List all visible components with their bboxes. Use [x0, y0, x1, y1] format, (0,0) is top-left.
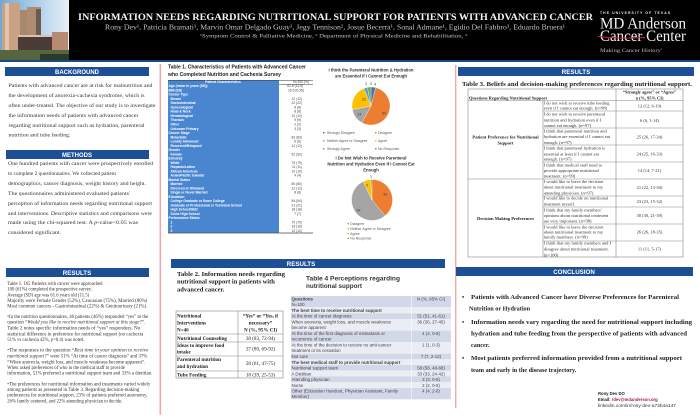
panel: table 1 patient characteristics: Patient Characteristics	[205, 80, 241, 84]
panel: table 1 patient characteristics: Cancer Type	[168, 93, 188, 97]
table 4 rows: Member)	[292, 394, 310, 399]
panel: table 1 patient characteristics: Female	[170, 152, 182, 156]
table 3 grid	[468, 89, 683, 257]
panel: table 1 patient characteristics	[167, 64, 313, 233]
panel: table 1 patient characteristics: Graduate or Professional or Technical School	[170, 203, 242, 207]
panel: table 1 patient characteristics: Cancer Stage	[168, 131, 190, 135]
legend 2: Agree	[350, 232, 360, 236]
results text: Most common cancers - Gastrointestinal (22%) & Genitourinary (21%).	[7, 305, 147, 310]
divider line left	[160, 64, 161, 415]
table 4 rows: Questions	[292, 296, 314, 302]
methods text: and interventions. Descriptive statistics and comparisons were	[8, 211, 153, 217]
panel: table 1 patient characteristics: 10 (10)	[292, 169, 302, 173]
panel: table 1 patient characteristics: 70 (70)	[292, 220, 302, 224]
middle results bar	[171, 259, 445, 268]
table 3 title: Table 3. Beliefs and decision-making preferences regarding nutritional support.	[462, 81, 692, 88]
panel: table 3 beliefs: I do not wish to receive tube feeding	[544, 101, 610, 106]
table 4 title: nutritional support	[306, 283, 363, 290]
panel: table 2 information needs: 38 (83, 72-94)	[246, 335, 275, 342]
panel: table 1 patient characteristics: 52 (52)	[292, 152, 302, 156]
table 2 title: Table 2. Information needs regarding	[177, 271, 286, 278]
pie chart: do not wish parenteral nutrition	[327, 156, 415, 241]
panel: table 3 beliefs: I would like to decide on nutritional	[544, 196, 609, 201]
panel: table 1 patient characteristics: 22 (22)	[292, 101, 302, 105]
panel: results left	[6, 268, 152, 404]
panel: table 3 beliefs: 12 (12, 6-19)	[638, 104, 662, 110]
table 4 rows: The best medical staff to provide nutritional support	[292, 360, 401, 365]
panel: table 3 beliefs: about nutritional treatment to my	[544, 229, 604, 234]
affiliations: ¹Symptom Control & Palliative Medicine, ² Department of Physical Medicine and Rehabilitation, ³	[200, 33, 467, 40]
table 4 rows: Other (Education Handout, Physician Assistant, Family	[292, 388, 399, 394]
panel: table 3 beliefs: I think that my family members and I	[544, 241, 612, 246]
panel: table 1 patient characteristics: High School/GED	[170, 208, 198, 212]
panel: table 1 patient characteristics: 18 (18)	[292, 208, 302, 212]
panel: table 2 information needs: N=46	[177, 328, 189, 334]
table 2 title: advanced cancer.	[177, 286, 225, 293]
panel: table 1 patient characteristics: Other	[170, 122, 180, 126]
legend 2: Disagree	[350, 222, 364, 226]
background text: often under-treated. The objective of our study is to investigate	[8, 102, 156, 109]
pie chart: do not wish parenteral nutrition: 6	[366, 183, 368, 187]
panel: table 3 beliefs: I think that parenteral hydration is	[544, 146, 605, 151]
methods text: The questionnaires administered evaluated patients'	[8, 191, 130, 197]
pie chart: essential parenteral nutrition: 3	[365, 82, 367, 86]
panel: table 3 beliefs: n (%, 95% CI)	[636, 95, 664, 100]
pie chart: essential parenteral nutrition: 22	[362, 97, 366, 101]
panel: table 1 patient characteristics: Hispanic/Latino	[170, 165, 195, 169]
panel: table 1 patient characteristics: 3 (3)	[294, 127, 301, 131]
panel: table 3 beliefs: even if I cannot eat enough. (n=98)	[544, 106, 608, 111]
table 2 grid	[176, 311, 283, 378]
panel: methods	[6, 150, 153, 236]
panel: table 1 patient characteristics: 18 (18)	[292, 225, 302, 229]
panel: table 3 beliefs: I think that parenteral nutrition and	[544, 129, 608, 134]
table 4 rows: At the time of the decision to receive no anti-cancer	[292, 342, 392, 348]
table 4 rows: Attending physician	[292, 377, 330, 382]
panel: table 1 patient characteristics: Unknown Primary	[170, 127, 199, 131]
panel: table 3 beliefs: 6 (6, 1-14)	[640, 118, 660, 124]
conclusion bullets: •	[462, 294, 464, 301]
background text: the information needs of patients with advanced cancer	[8, 112, 139, 119]
logo: MD Anderson Cancer Center: Making Cancer History'	[600, 49, 662, 54]
panel: table 1 patient characteristics: Marital Status	[168, 178, 190, 182]
table 4 rows: Not sure	[292, 354, 309, 359]
panel: table 1 patient characteristics: 11 (11)	[292, 165, 302, 169]
panel: table 2 information needs: Ideas to improve food	[177, 343, 224, 349]
results text	[7, 282, 152, 404]
panel: table 1 patient characteristics: Recurrent/Relapsed	[170, 144, 202, 148]
panel: table 1 patient characteristics: 83 (83)	[292, 135, 302, 139]
panel: table 3 beliefs: I think that medical staff need to	[544, 162, 603, 167]
panel: table 1 patient characteristics: Some High School	[170, 212, 200, 216]
panel: table 1 patient characteristics: Age (mean in years (SD))	[168, 84, 208, 88]
chart title 2: Enough	[363, 168, 379, 172]
panel: table 3 beliefs: Support	[497, 140, 514, 146]
chart title 2	[327, 156, 415, 172]
panel: table 1 patient characteristics: 8 (8)	[294, 110, 301, 114]
results text: Table 2 notes specific information needs of “yes” responders. No	[7, 326, 141, 332]
panel: table 1 patient characteristics: 3	[170, 229, 172, 233]
panel: table 1 patient characteristics: 9 (9)	[294, 118, 301, 122]
legend 1: Neither Agree or Disagree	[327, 139, 368, 143]
panel: table 1 patient characteristics: College Graduate or Some College	[170, 199, 225, 203]
panel: table 3 beliefs: 30 (30, 21-39)	[637, 213, 663, 219]
panel: table 1 patient characteristics: 12 (12)	[292, 97, 302, 101]
panel: table 3 beliefs: 24 (25, 16-33)	[637, 152, 663, 158]
panel: table 3 beliefs: hydration are essential if I cannot eat	[544, 134, 611, 139]
methods text: made using the chi-squared test. A p-value<0.05 was	[8, 220, 138, 226]
panel: table 3 beliefs: provide appropriate nutritional	[544, 168, 600, 173]
panel: table 3 beliefs: 11 (11, 5-17)	[638, 246, 662, 252]
legend 2: No Response	[350, 237, 372, 241]
panel: table 3 beliefs: about nutritional treatment to my	[544, 185, 604, 190]
panel: table 1 patient characteristics: Single or Never Married	[170, 191, 208, 195]
legend 1: Disagree	[378, 131, 392, 135]
table 4 rows: 4 (4, 2-8)	[422, 388, 440, 394]
table 4 rows: The best time to receive nutritional support	[292, 308, 382, 313]
panel: table 3 beliefs: 25 (26, 17-34)	[637, 134, 663, 140]
table 4 rows: At the time of cancer diagnosis	[292, 314, 352, 319]
panel: table 1 patient characteristics: 54 (54)	[292, 199, 302, 203]
panel: table 1 patient characteristics: Performance Status	[168, 216, 200, 220]
legend 1	[323, 131, 399, 151]
results text: nutritional support? ” were 51% “At time of cancer diagnosis” and 37%	[7, 353, 147, 359]
panel: table 2 information needs: intake	[177, 350, 191, 356]
panel: table 3 beliefs: 21 (22, 13-30)	[637, 185, 663, 191]
panel: table 2 information needs: Nutritional	[177, 314, 202, 320]
panel: table 1 patient characteristics: Locally Advanced	[170, 140, 198, 144]
contact details	[598, 391, 677, 408]
legend 1: Strongly Disagree	[327, 131, 355, 135]
panel: table 1 patient characteristics: 10 (10)	[292, 114, 302, 118]
conclusion bullets: Nutrition or Hydration	[469, 306, 531, 312]
methods text: considered significant.	[8, 229, 61, 236]
photo: hospital buildings	[0, 0, 69, 60]
pie chart: do not wish parenteral nutrition: 1	[370, 175, 372, 179]
heading: methods: METHODS	[62, 153, 92, 159]
table 4 rows: A Dietitian	[292, 371, 312, 376]
panel: table 3 beliefs: disagree about nutritional treatment.	[544, 246, 609, 251]
panel: table 1 patient characteristics: N=100 (%)	[293, 80, 309, 84]
panel: table 1 patient characteristics: Metastatic	[170, 135, 187, 139]
table 2 title	[177, 271, 286, 293]
panel: table 1 patient characteristics: 7 (7)	[294, 212, 301, 216]
chart title 1	[329, 68, 414, 78]
panel: table 3 beliefs: nutrition and hydration even if I	[544, 117, 602, 122]
results text: •The preferences for nutritional information and treatments varied widely	[7, 383, 151, 388]
table 4 rows: 36 (36, 27-45)	[417, 319, 445, 324]
table 1 title: Table 1. Characteristics of Patients with Advanced Cancer	[168, 64, 306, 70]
table 1 title: who Completed Nutrition and Cachexia Survey	[167, 72, 281, 78]
table 4 rows: 33 (33, 24-42)	[417, 371, 445, 376]
background text: the development of anorexia-cachexia syndrome, which is	[8, 92, 144, 99]
pie 1 wedges	[352, 87, 390, 125]
table 4 rows: N (%, 95% CI)	[417, 296, 446, 302]
results text: Majority were Female Gender (52%), Caucasian (75%), Married (80%)	[7, 299, 148, 304]
divider line right	[455, 65, 456, 408]
panel: table 1 patient characteristics: 80 (80)	[292, 182, 302, 186]
conclusion bullets: team and early in the disease trajectory.	[471, 367, 577, 374]
results text: question “Would you like to receive nutritional support at this stage? ”.	[7, 320, 145, 326]
background text: nutrition and tube feeding.	[8, 132, 70, 139]
panel: table 4 perceptions	[291, 276, 451, 399]
panel: table 3 beliefs: I do not wish to receive parenteral	[544, 112, 606, 117]
panel: table 3 beliefs: family members. (n=99)	[544, 235, 588, 240]
panel: table 1 patient characteristics: Ethnicity	[168, 157, 183, 161]
panel: table 2 information needs: 18 (39, 25-53)	[246, 372, 275, 378]
panel: table 1 patient characteristics: White	[170, 161, 180, 165]
panel: table 1 patient characteristics: Hematological	[170, 114, 193, 118]
panel: table 3 beliefs: (n=100)	[544, 252, 559, 257]
table 4 rows: treatment or its cessation	[292, 348, 341, 353]
pie chart: essential parenteral nutrition: 3	[370, 82, 372, 86]
pie chart: essential parenteral nutrition	[323, 68, 414, 151]
panel: table 3 beliefs: enough. (n=97)	[544, 140, 572, 145]
panel: table 1 patient characteristics: 4 (4)	[294, 174, 301, 178]
panel: conclusion	[456, 267, 693, 408]
table 4 rows: At the time of the first diagnosis of metastasis or	[292, 331, 386, 336]
conclusion bullets: Patients with Advanced Cancer have Diverse Preferences for Parenteral	[471, 294, 679, 301]
panel: table 1 patient characteristics: Gender	[168, 148, 181, 152]
panel: table 1 patient characteristics: 8 (8)	[294, 191, 301, 195]
results text: 100 (61%) completed the prospective survey.	[7, 288, 92, 293]
pie chart: essential parenteral nutrition: 54	[382, 111, 386, 115]
panel: table 3 beliefs: attending physician. (n=97)	[544, 190, 594, 195]
conclusion heading	[456, 267, 693, 276]
conclusion bullets: hydration and tube feeding from the perspective of patients with advanced	[471, 330, 688, 337]
chart title 2: I Do Not Wish to Receive Parenteral	[336, 156, 406, 160]
panel: table 1 patient characteristics: 12 (12)	[292, 186, 302, 190]
background text: regarding nutritional support such as hydration, parenteral	[8, 123, 145, 129]
panel: table 1 patient characteristics: 12 (12)	[292, 144, 302, 148]
panel: table 1 patient characteristics: 8 (8)	[294, 106, 301, 110]
table 4 rows: Nurse	[292, 383, 304, 388]
panel: table 3 beliefs: opinions about nutritional treatment	[544, 213, 609, 218]
table 4 rows: become apparent	[292, 325, 326, 330]
panel: table 3 beliefs: are very important. (n=98)	[544, 218, 592, 223]
panel: table 3 beliefs: 14 (14, 7-21)	[638, 168, 662, 174]
chart title 2: Nutrition and Hydration Even If I Cannot Eat	[327, 162, 415, 166]
panel: table 3 beliefs: I would like to leave the decision	[544, 179, 604, 184]
table 4 rows: 58 (58, 48-68)	[417, 366, 445, 371]
panel: table 1 patient characteristics: 2	[170, 225, 172, 229]
panel: table 1 patient characteristics: Head & Neck	[170, 110, 191, 114]
middle results bar: RESULTS	[287, 261, 315, 268]
results text: •The responses to the question “ Best time in your opinion to receive	[7, 348, 148, 354]
results text: •In the nutrition questionnaires, 46 patients (46%) responded “yes” to the	[7, 314, 148, 320]
panel: table 2 information needs: 28 (61, 47-75)	[246, 360, 275, 367]
panel: table 2 information needs	[176, 271, 286, 378]
panel: table 1 patient characteristics: Breast	[170, 97, 182, 101]
table 4 rows	[291, 296, 451, 399]
pie chart: essential parenteral nutrition: 14	[357, 112, 361, 116]
panel: table 3 beliefs: cannot eat enough. (n=97)	[544, 123, 591, 128]
results text: Average (SD) age was 61.6 years old (11.5)	[7, 293, 90, 298]
table 4 title	[306, 276, 400, 290]
panel: table 2 information needs: necessary”	[249, 320, 273, 326]
panel: table 1 patient characteristics: 61.6 (11.5)	[287, 84, 303, 88]
chart title 1: are Essential If I Cannot Eat Enough	[335, 74, 407, 78]
panel: table 1 patient characteristics: 21 (21)	[292, 203, 302, 207]
legend 1: Agree	[378, 139, 387, 143]
panel: table 1 patient characteristics: BMI (SD)	[168, 88, 182, 92]
authors: Rony Dev¹, Patricia Bramati¹, Marvin Omar Delgado Guay¹, Jegy Tennison², Josue Becerra¹, Sonal Admane¹, Egidio Del Fabbro³, Eduardo Bruera¹	[105, 22, 565, 31]
table 4 title: Table 4 Perceptions regarding	[306, 276, 400, 282]
conclusion bullets: •	[462, 355, 464, 362]
panel: table 2 information needs: and hydration	[177, 364, 208, 370]
table 4 rows: When anorexia, weight loss, and muscle weakness	[292, 319, 392, 324]
header banner	[0, 0, 700, 62]
logo: MD Anderson Cancer Center: THE UNIVERSITY OF TEXAS	[600, 11, 671, 15]
methods text: One hundred patients with cancer were prospectively enrolled	[8, 161, 153, 167]
panel: table 2 information needs: N (%, 95% CI)	[244, 326, 277, 334]
panel: table 1 patient characteristics: Gastrointestinal	[170, 101, 196, 105]
background text: Patients with advanced cancer are at risk for malnutrition and	[8, 82, 153, 89]
methods text: demographics, cancer diagnosis, weight history and height.	[8, 181, 146, 187]
panel: table 3 beliefs: Questions Regarding Nutritional Support	[469, 96, 547, 100]
panel: table 3 beliefs: I would like to leave the decision	[544, 224, 604, 229]
panel: table 3 beliefs: essential at least if I cannot eat	[544, 151, 600, 156]
background text	[8, 82, 156, 139]
panel: table 2 information needs: Parenteral nutrition	[177, 357, 221, 363]
results text: 26% family centered, and 22% attending physician to decide.	[7, 399, 122, 404]
table 4 rows: 7 (7, 2-12)	[421, 354, 442, 359]
table 4 rows: recurrence of cancer	[292, 337, 332, 342]
panel: table 3 beliefs: “Strongly agree” or “Agree”	[623, 90, 676, 94]
results text: When asked preferences of who in the medical staff to provide	[7, 366, 125, 371]
table 4 rows: 3 (3, 0-6)	[422, 377, 440, 382]
table 4 rows: N=100	[292, 302, 305, 307]
panel: table 1 patient characteristics: 75 (75)	[292, 161, 302, 165]
panel: table 2 information needs: Interventions	[177, 320, 206, 326]
conclusion bullets: Most patients preferred information provided from a nutritional support	[471, 355, 683, 362]
panel: table 1 patient characteristics: 2 (2)	[294, 122, 301, 126]
methods text: perception of information needs regarding nutritional support	[8, 200, 153, 207]
conclusion bullets: •	[462, 319, 464, 326]
table 4 rows: 2 (2, 0-5)	[422, 383, 440, 388]
panel: table 1 patient characteristics: Divorced or Widowed	[170, 186, 204, 190]
chart title 1: I think the Parenteral Nutrition & Hydration	[329, 68, 414, 72]
methods text	[8, 161, 153, 236]
results text: 51% vs cachexia 42%, p=0.4) was noted.	[7, 338, 85, 343]
contact details: Rony Dev DO	[598, 391, 626, 396]
panel: table 2 information needs: Tube Feeding	[177, 372, 207, 378]
legend 1: No Response	[378, 147, 399, 151]
panel: table 3 beliefs: Decision Making Preferences	[477, 216, 534, 221]
pie chart: do not wish parenteral nutrition: 39	[383, 192, 387, 196]
legend 2	[348, 222, 391, 241]
panel: table 1 patient characteristics: Gynecological	[170, 106, 193, 110]
pie chart: essential parenteral nutrition: 4	[374, 82, 376, 86]
panel: table 1 patient characteristics: 6 (6)	[294, 140, 301, 144]
table 4 rows: 1 (1, 0-3)	[422, 342, 440, 348]
results text: preferences for nutritional support, 23% of patients preferred autonomy,	[7, 394, 147, 399]
panel: table 3 beliefs: Patient Preference for Nutritional	[472, 134, 539, 140]
panel: table 2 information needs: “Yes” or “Yes, if	[243, 314, 278, 320]
results text: “When anorexia, weight loss, and muscle weakness become apparent”.	[7, 360, 145, 366]
methods text: to complete 2 questionnaires. We collected patient	[8, 171, 116, 177]
heading: results: RESULTS	[63, 270, 91, 277]
results text: among patients as presented in Table 3. Regarding decision-making	[7, 388, 140, 393]
pie chart: do not wish parenteral nutrition: 54	[356, 208, 361, 212]
heading: background: BACKGROUND	[55, 70, 100, 76]
panel: table 3 beliefs: enough. (n=97)	[544, 157, 572, 162]
conclusion bullets: Information needs vary regarding the need for nutritional support including	[471, 319, 693, 326]
table 2 title: nutritional support in patients with	[177, 279, 275, 286]
logo: MD Anderson Cancer Center	[598, 11, 687, 54]
panel: table 3 beliefs	[458, 67, 694, 257]
table 4 rows: 4 (4, 0-8)	[422, 331, 440, 336]
panel: table 1 patient characteristics: 1	[170, 220, 172, 224]
results text: information, 51% preferred a nutritional support team and 33% a dietitian.	[7, 371, 152, 376]
conclusion bullets: cancer.	[471, 342, 490, 349]
title: INFORMATION NEEDS REGARDING NUTRITIONAL SUPPORT FOR PATIENTS WITH ADVANCED CANCER	[78, 12, 594, 23]
panel: table 1 patient characteristics: 12 (12)	[292, 229, 302, 233]
contact details: linkedin.com/in/rony-dev-a73b4a147	[598, 403, 677, 408]
table 4 rows: 51 (51, 41-61)	[417, 314, 445, 319]
legend 1: Strongly Agree	[327, 147, 350, 151]
results heading right: RESULTS	[562, 69, 590, 76]
panel: table 1 patient characteristics: Asian/Pacific Islander	[170, 174, 205, 178]
logo: MD Anderson Cancer Center: MD Anderson	[600, 16, 686, 32]
results heading right	[458, 67, 694, 76]
panel: table 1 patient characteristics: Education	[168, 195, 184, 199]
panel: table 3 beliefs: 26 (26, 18-35)	[637, 230, 663, 236]
table 4 rows: Nutritional support team	[292, 366, 338, 371]
conclusion bullets	[462, 294, 693, 374]
panel: table 1 patient characteristics: 26.5 (6.35)	[288, 88, 304, 92]
panel: table 3 beliefs: I think that my family members'	[544, 207, 602, 212]
panel: table 3 beliefs: 23 (23, 15-32)	[637, 199, 663, 205]
table 1 title	[167, 64, 306, 78]
panel: table 3 beliefs: treatment. (n=99)	[544, 173, 576, 178]
panel: table 1 patient characteristics: African American	[170, 169, 198, 173]
logo: MD Anderson Cancer Center: Cancer Center	[600, 28, 687, 45]
panel: table 2 information needs: 37 (80, 69-92)	[246, 346, 275, 353]
panel: table 1 patient characteristics: Thoracic	[170, 118, 184, 122]
pie 2 wedges	[352, 179, 393, 220]
results text: Table 1. 165 Patients with cancer were approached	[7, 282, 103, 287]
panel: table 1 patient characteristics: Married	[170, 182, 182, 186]
results text: statistical difference in preference for nutritional support (no cachexia	[7, 332, 144, 337]
panel: table 2 information needs: Nutritional Counseling	[177, 336, 227, 342]
panel: table 3 beliefs: treatment myself.	[544, 202, 575, 207]
conclusion heading: CONCLUSION	[553, 269, 595, 276]
panel: background	[5, 67, 156, 139]
contact details: Email: rdev@mdanderson.org	[598, 397, 658, 402]
legend 2: Neither Agree or Disagree	[350, 227, 391, 231]
